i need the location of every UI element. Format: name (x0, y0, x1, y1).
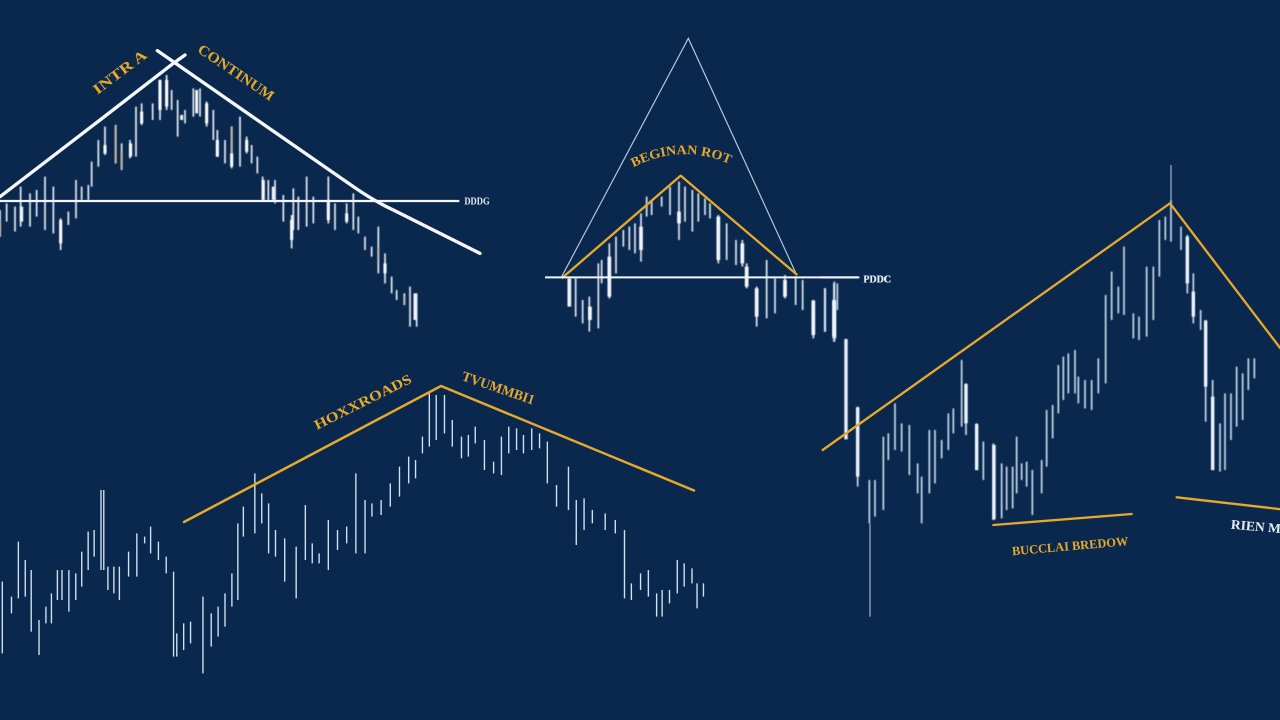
gold main trend lines (823, 203, 1280, 450)
right slope label: CONTINUM (194, 42, 277, 105)
candlestick bodies (569, 212, 834, 338)
gold trend lines (184, 386, 694, 522)
candlestick wicks (576, 182, 834, 342)
chart: bottom-left long pattern (2, 370, 703, 673)
gold lower right line (1177, 497, 1280, 509)
outer thin triangle (562, 38, 797, 277)
orange-tinted wicks (0, 125, 404, 305)
candlestick wicks (825, 200, 1254, 523)
gold inner trend lines (562, 176, 797, 278)
candlestick wicks (2, 393, 703, 673)
right white label: RIEN M (1230, 517, 1280, 536)
right trend line (157, 51, 480, 253)
left slope label: HOXXROADS (312, 372, 415, 434)
support label: BUCCLAI BREDOW (1011, 534, 1129, 558)
left slope label: INTR A (90, 47, 151, 98)
chart: right large pattern (820, 165, 1280, 617)
chart: top-left head and shoulders (0, 42, 490, 327)
top spike wick (1169, 165, 1173, 203)
neckline stub label: PDDC (863, 275, 891, 286)
neckline (0, 197, 459, 204)
neckline (545, 274, 858, 280)
candlestick bodies (22, 80, 415, 320)
arched curve label: BEGINAN ROT (630, 145, 733, 168)
chart: top-centre triangle pattern (545, 37, 891, 342)
neckline stub (820, 274, 859, 280)
neckline label: DDDG (464, 197, 490, 208)
gold lower support line (993, 514, 1132, 525)
long lower wick (868, 523, 872, 617)
right slope label: TVUMMBI1 (460, 370, 536, 409)
candlestick bodies (834, 237, 1213, 519)
candlestick wicks (0, 75, 417, 327)
plotted candles (2, 393, 703, 673)
left trend line (0, 55, 185, 197)
neckline label: PDDC (863, 275, 891, 286)
